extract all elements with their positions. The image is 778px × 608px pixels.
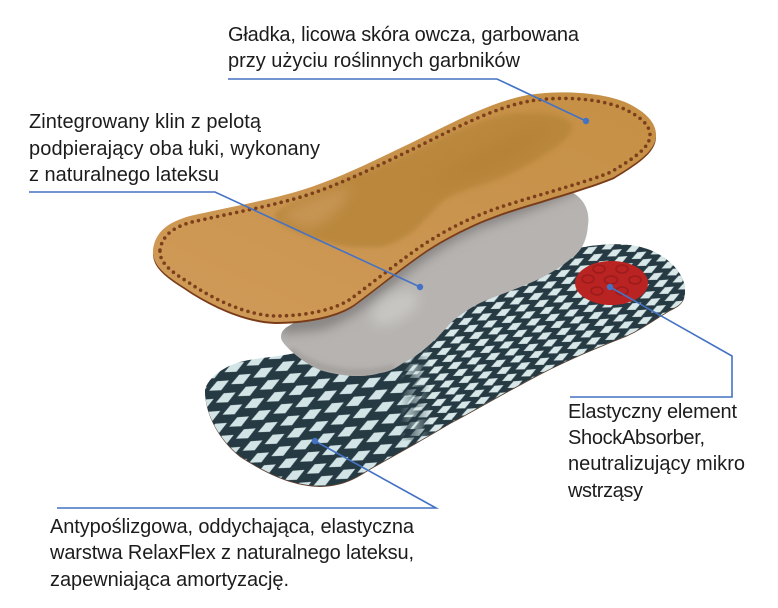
top layer: leather bbox=[153, 92, 656, 324]
leader line: leather bbox=[228, 79, 586, 121]
text: shock absorber: Elastyczny element bbox=[568, 401, 737, 423]
leader dot: mesh layer bbox=[312, 438, 318, 444]
text: shock absorber: neutralizujący mikro bbox=[568, 453, 745, 475]
callout: wedge bbox=[29, 111, 423, 290]
leader line: mesh layer bbox=[57, 441, 436, 508]
text: wedge: Zintegrowany klin z pelotą bbox=[29, 111, 262, 133]
text: shock absorber: wstrząsy bbox=[567, 480, 643, 502]
text: mesh layer: zapewniająca amortyzację. bbox=[50, 569, 289, 591]
red shock absorber disc bbox=[575, 261, 648, 305]
leader dot: shock absorber bbox=[607, 284, 613, 290]
callout: mesh layer bbox=[49, 438, 436, 591]
leader dot: wedge bbox=[417, 284, 423, 290]
leader line: wedge bbox=[29, 192, 420, 287]
text: leather: Gładka, licowa skóra owcza, garbowana bbox=[228, 24, 580, 46]
middle layer: latex wedge bbox=[281, 193, 588, 376]
stitching bbox=[160, 98, 650, 316]
text: shock absorber: ShockAbsorber, bbox=[568, 427, 705, 449]
leader line: shock absorber bbox=[570, 287, 732, 397]
text: wedge: podpierający oba łuki, wykonany bbox=[29, 138, 320, 160]
text: mesh layer: warstwa RelaxFlex z naturalnego lateksu, bbox=[49, 542, 414, 564]
callout: leather bbox=[228, 24, 589, 124]
text: mesh layer: Antypoślizgowa, oddychająca, elastyczna bbox=[50, 516, 415, 538]
text: leather: przy użyciu roślinnych garbników bbox=[228, 50, 521, 72]
text: wedge: z naturalnego lateksu bbox=[29, 164, 219, 186]
bottom layer: anti-slip mesh bbox=[205, 244, 685, 487]
callout: shock absorber bbox=[567, 284, 751, 502]
insole illustration bbox=[153, 92, 685, 487]
leader dot: leather bbox=[583, 118, 589, 124]
arch depression bbox=[274, 113, 572, 247]
